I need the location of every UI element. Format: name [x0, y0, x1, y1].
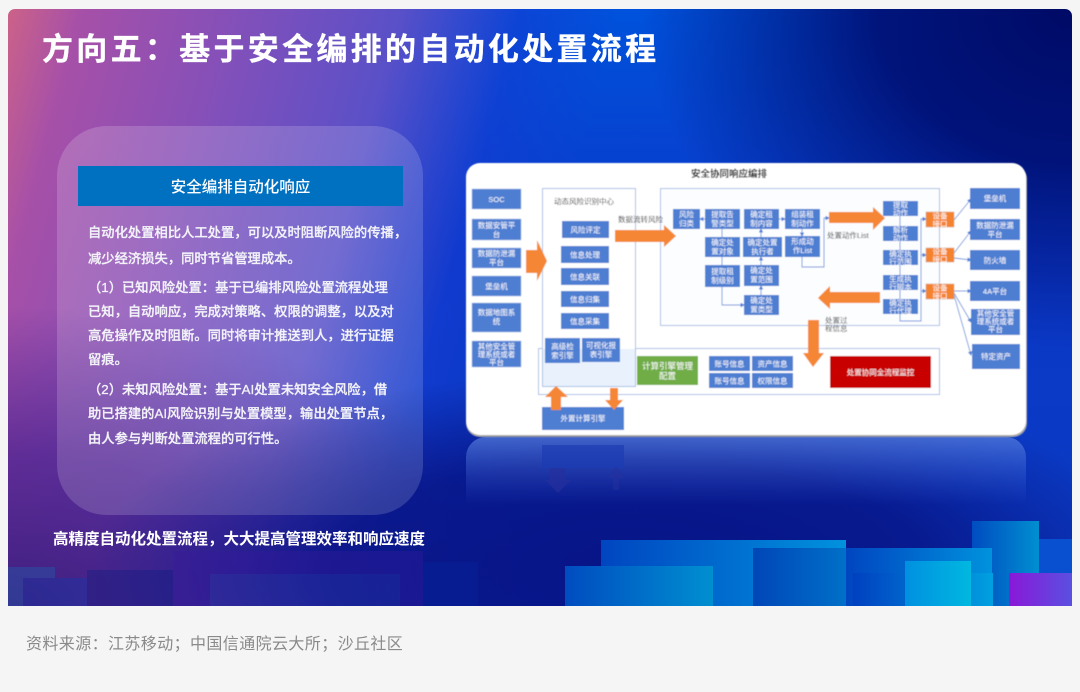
left source systems: SOC — [488, 195, 505, 204]
orchestration flow boxes: 行脚本 — [889, 282, 912, 292]
orchestration flow boxes: 确定处 — [711, 237, 734, 247]
orchestration flow boxes: 置范围 — [750, 274, 773, 284]
arrow labels — [618, 214, 870, 333]
bottom configuration row: 资产信息 — [758, 358, 788, 368]
diagram title: 安全协同响应编排 — [691, 168, 767, 180]
panel heading: 安全编排自动化响应 — [171, 177, 310, 196]
orchestration flow boxes: 行范围 — [889, 256, 912, 266]
orchestration flow boxes: 确定处置 — [748, 237, 778, 247]
orchestration flow boxes: 制级别 — [711, 275, 734, 285]
left source systems: 台 — [493, 229, 500, 239]
orchestration flow boxes: 确定处 — [750, 265, 773, 275]
right target systems: 4A平台 — [983, 286, 1007, 296]
orchestration flow boxes: 确定执 — [889, 298, 912, 308]
known risk paragraph: 高危操作及时阻断。同时将审计推送到人，进行证据 — [88, 327, 394, 343]
orchestration flow boxes: 动作 — [893, 208, 908, 218]
intro paragraph: 自动化处置相比人工处置，可以及时阻断风险的传播， — [88, 224, 407, 240]
right target systems: 平台 — [988, 324, 1003, 334]
diagram reflection — [466, 437, 1026, 517]
left source systems: 其他安全管 — [478, 341, 516, 351]
orchestration flow boxes: 提取 — [893, 200, 908, 210]
bottom configuration row: 计算引擎管理 — [642, 361, 693, 371]
bottom configuration row — [542, 356, 931, 430]
right target systems: 特定资产 — [981, 351, 1011, 361]
orchestration flow boxes: 提取租 — [711, 266, 734, 276]
orchestration flow boxes: 确定执 — [889, 248, 912, 258]
arrow labels: 处置过 — [825, 315, 848, 325]
left source systems: 平台 — [489, 357, 504, 367]
left source systems: 理系统或者 — [478, 349, 516, 359]
bottom configuration row: 处置协同全流程监控 — [847, 367, 915, 377]
panel: security orchestration text — [57, 126, 423, 515]
known risk paragraph: 已知，自动响应，完成对策略、权限的调整，以及对 — [88, 303, 394, 319]
right target systems: 数据防泄漏 — [976, 220, 1014, 230]
right target systems: 堡垒机 — [984, 193, 1007, 203]
left source systems — [472, 189, 521, 367]
left source systems: 数据地图系 — [478, 307, 516, 317]
arrow labels: 程信息 — [825, 323, 848, 333]
known risk paragraph — [88, 279, 394, 367]
panel heading — [78, 166, 403, 206]
risk identification center: 可视化报 — [586, 340, 616, 350]
orchestration flow boxes: 警类型 — [711, 218, 734, 228]
bottom configuration row: 账号信息 — [714, 358, 745, 368]
orchestration flow boxes: 作List — [793, 245, 813, 255]
device interfaces: 接口 — [932, 254, 948, 264]
title: 方向五：基于安全编排的自动化处置流程 — [42, 32, 659, 67]
risk identification center: 表引擎 — [590, 349, 613, 359]
unknown risk paragraph: （2）未知风险处置：基于AI处置未知安全风险，借 — [88, 381, 387, 397]
device interfaces: 接口 — [932, 290, 948, 300]
right target systems: 其他安全管 — [977, 308, 1015, 318]
orchestration flow boxes: 动作 — [893, 232, 908, 242]
bottom configuration row: 账号信息 — [714, 376, 745, 386]
right target systems: 平台 — [988, 229, 1002, 239]
orchestration flow boxes: 制内容 — [750, 218, 773, 228]
right target systems: 防火墙 — [984, 255, 1007, 265]
arrow labels: 数据流转风险 — [618, 214, 663, 224]
bottom configuration row: 外置计算引擎 — [560, 413, 606, 423]
intro paragraph — [88, 224, 407, 266]
risk identification center: 风险评定 — [570, 224, 601, 234]
orchestration flow boxes: 归类 — [679, 218, 694, 228]
left source systems: 统 — [493, 316, 501, 326]
orchestration flow boxes: 确定租 — [750, 209, 773, 219]
orchestration flow boxes: 行代理 — [889, 306, 912, 316]
risk identification center: 动态风险识别中心 — [554, 196, 614, 206]
right target systems: 理系统或者 — [977, 316, 1015, 326]
risk identification center: 信息采集 — [570, 316, 600, 326]
orchestration flow boxes: 置类型 — [750, 304, 773, 314]
orchestration flow boxes: 执行者 — [751, 246, 774, 256]
orchestration flow boxes — [673, 200, 918, 316]
device interfaces: 接口 — [932, 218, 948, 228]
unknown risk paragraph: 由人参与判断处置流程的可行性。 — [88, 430, 287, 446]
unknown risk paragraph — [88, 381, 393, 446]
risk identification center: 信息归集 — [570, 294, 600, 304]
flow diagram card — [466, 163, 1027, 437]
connector lines — [700, 199, 971, 355]
orchestration flow boxes: 确定处 — [750, 295, 773, 305]
bottom summary text: 高精度自动化处置流程，大大提高管理效率和响应速度 — [53, 529, 426, 548]
bottom configuration row: 权限信息 — [758, 376, 788, 386]
decorative bottom blocks left — [8, 551, 478, 606]
unknown risk paragraph: 助已搭建的AI风险识别与处置模型，输出处置节点， — [88, 405, 393, 421]
orchestration flow boxes: 解析 — [893, 224, 908, 234]
intro paragraph: 减少经济损失，同时节省管理成本。 — [88, 250, 301, 266]
source note: 资料来源：江苏移动；中国信通院云大所；沙丘社区 — [26, 635, 403, 653]
orchestration flow boxes: 形成动 — [791, 236, 814, 246]
device interfaces — [926, 210, 954, 300]
left source systems: 堡垒机 — [485, 281, 508, 291]
risk identification center — [545, 196, 620, 363]
left source systems: 数据安管平 — [478, 220, 516, 230]
left source systems: 数据防泄漏 — [478, 248, 516, 258]
left source systems: 平台 — [489, 257, 504, 267]
orchestration flow boxes: 提取告 — [711, 209, 734, 219]
orchestration flow boxes: 生成执 — [889, 274, 912, 284]
orchestration flow boxes: 制动作 — [791, 218, 814, 228]
device interfaces: 设备 — [932, 246, 948, 256]
device interfaces: 设备 — [932, 210, 948, 220]
known risk paragraph: 留痕。 — [88, 352, 128, 367]
device interfaces: 设备 — [932, 282, 948, 292]
orchestration flow boxes: 风险 — [679, 209, 694, 219]
known risk paragraph: （1）已知风险处置：基于已编排风险处置流程处理 — [88, 279, 388, 295]
risk identification center: 索引擎 — [551, 350, 574, 360]
orchestration flow boxes: 置对象 — [711, 246, 734, 256]
orange arrows — [526, 207, 885, 410]
arrow labels: 处置动作List — [827, 230, 870, 240]
decorative bottom blocks right — [565, 521, 1072, 606]
risk identification center: 信息关联 — [570, 272, 600, 282]
risk identification center: 信息处理 — [570, 250, 600, 260]
containers — [538, 188, 940, 394]
orchestration flow boxes: 组装租 — [791, 209, 814, 219]
bottom configuration row: 配置 — [659, 371, 676, 381]
right target systems — [970, 188, 1020, 369]
risk identification center: 高级检 — [551, 341, 574, 351]
